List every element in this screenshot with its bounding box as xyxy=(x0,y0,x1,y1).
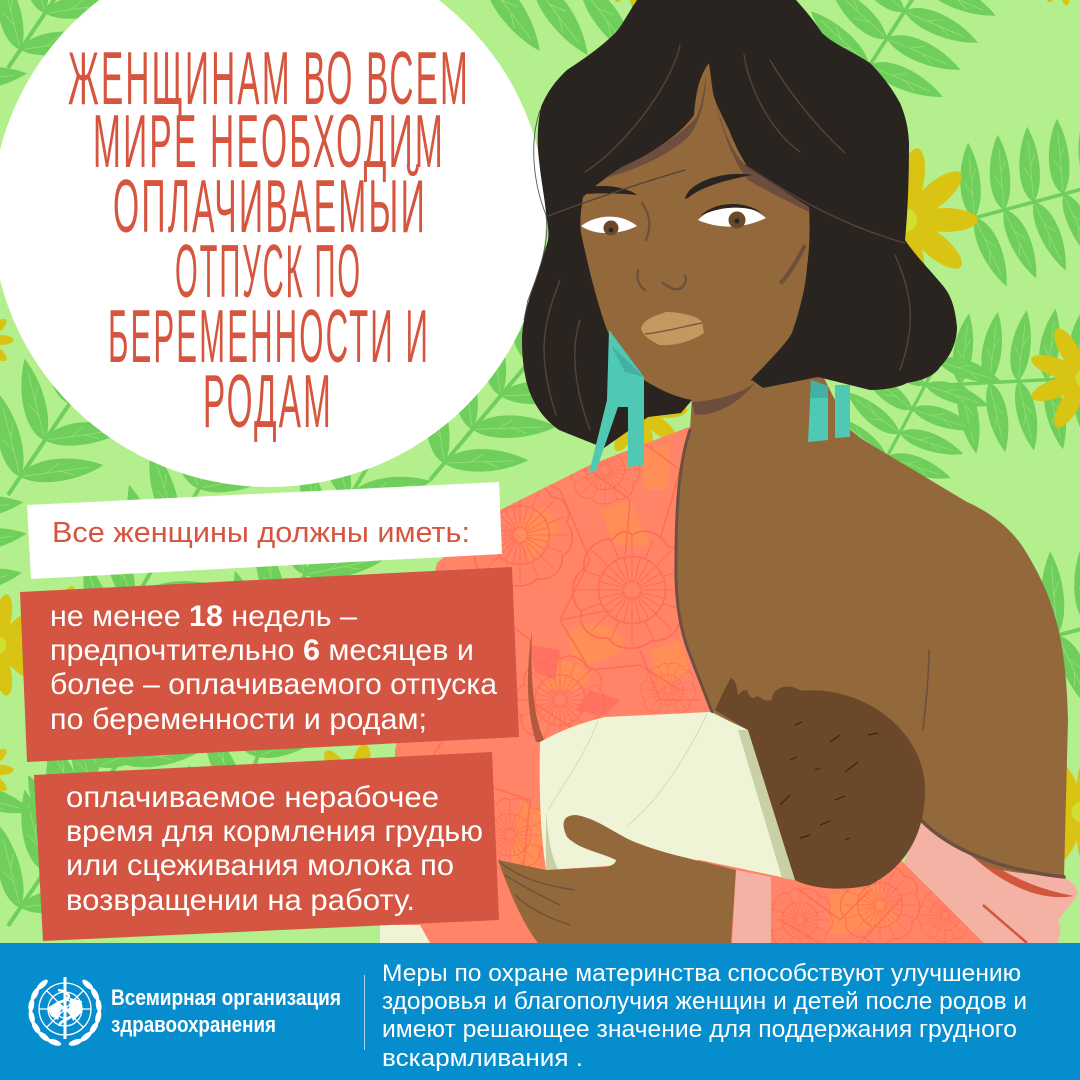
panel: paid breastfeeding breaks: оплачиваемое нерабочее xyxy=(66,781,439,814)
cream piece at dress hem xyxy=(380,925,430,943)
dress xyxy=(395,425,984,952)
panel: 18 weeks of leave: по беременности и родам; xyxy=(50,703,427,736)
hair shadow on forehead xyxy=(605,75,809,212)
hair strands xyxy=(524,45,910,430)
panel: paid breastfeeding breaks xyxy=(34,752,499,941)
footer message xyxy=(382,960,1027,1072)
title: ОПЛАЧИВАЕМЫЙ xyxy=(113,164,427,248)
right earring xyxy=(808,380,850,442)
neck shadow xyxy=(692,383,755,415)
right eye xyxy=(698,204,766,228)
panel: 18 weeks of leave: предпочтительно 6 месяцев и xyxy=(50,634,474,667)
baby cloth xyxy=(540,712,795,880)
pink cuff xyxy=(732,870,771,943)
footer band xyxy=(0,943,1080,1080)
text: БЕРЕМЕННОСТИ И xyxy=(108,294,430,378)
face xyxy=(580,63,810,415)
mother's hand xyxy=(498,815,736,943)
panel: all women should have xyxy=(27,482,502,579)
title: РОДАМ xyxy=(203,359,333,443)
panel: paid breastfeeding breaks: время для кормления грудью xyxy=(66,815,483,848)
nose xyxy=(637,203,686,290)
woman illustration xyxy=(380,0,1077,952)
title xyxy=(68,36,470,443)
lips xyxy=(641,312,704,345)
white circle behind title xyxy=(0,0,546,487)
panel: all women should have: Все женщины должны иметь: xyxy=(52,517,470,549)
left earring xyxy=(589,330,644,473)
footer message: здоровья и благополучия женщин и детей после родов и xyxy=(382,988,1027,1015)
text: ЖЕНЩИНАМ ВО ВСЕМ xyxy=(68,36,470,120)
hair back and silhouette xyxy=(522,0,957,448)
icon: WHO emblem xyxy=(28,977,102,1047)
title: ОТПУСК ПО xyxy=(175,229,362,313)
pink shawl xyxy=(904,820,1077,943)
panel: paid breastfeeding breaks: или сцеживания молока по xyxy=(66,849,454,882)
WHO wordmark xyxy=(111,985,341,1037)
panel: 18 weeks of leave xyxy=(20,567,519,762)
WHO wordmark: здравоохранения xyxy=(111,1012,276,1037)
left eye xyxy=(581,217,637,236)
baby head and hand xyxy=(715,678,925,889)
footer message: вскармливания . xyxy=(382,1045,583,1072)
eyebrows xyxy=(585,174,752,199)
panel: 18 weeks of leave: не менее 18 недель – xyxy=(50,600,357,633)
footer message: Меры по охране материнства способствуют улучшению xyxy=(382,960,1021,987)
panel: 18 weeks of leave: более – оплачиваемого отпуска xyxy=(50,668,497,701)
footer message: имеют решающее значение для поддержания грудного xyxy=(382,1016,1017,1043)
WHO wordmark: Всемирная организация xyxy=(111,985,341,1010)
mother's skin: neck, chest and arm xyxy=(676,370,1068,877)
panel: paid breastfeeding breaks: возвращении на работу. xyxy=(66,884,415,917)
text: МИРЕ НЕОБХОДИМ xyxy=(93,99,445,183)
